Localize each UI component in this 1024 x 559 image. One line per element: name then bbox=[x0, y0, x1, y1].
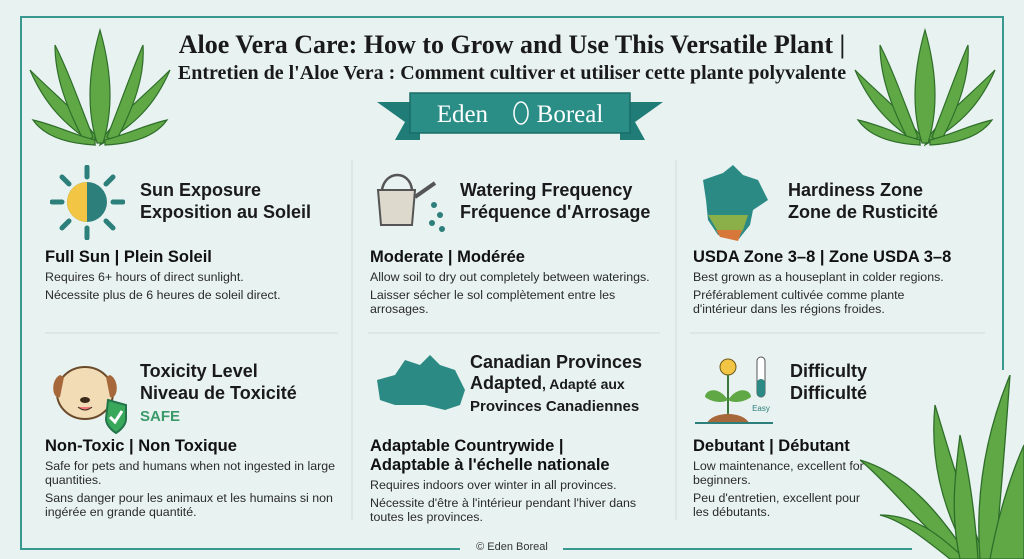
text block: Moderate | Modérée bbox=[370, 248, 525, 266]
heading: Difficulty bbox=[790, 361, 867, 381]
text block: Laisser sécher le sol complètement entre les arrosages. bbox=[370, 288, 615, 316]
text block bbox=[370, 437, 636, 524]
panel: hardiness bbox=[693, 165, 951, 316]
heading: Exposition au Soleil bbox=[140, 202, 311, 222]
icon: sprout with gauge bbox=[695, 356, 773, 424]
panel: provinces bbox=[370, 352, 642, 524]
text block: USDA Zone 3–8 | Zone USDA 3–8 bbox=[693, 248, 951, 266]
text block: Adaptable Countrywide | bbox=[370, 437, 563, 455]
title: Aloe Vera Care: How to Grow and Use This Versatile Plant | bbox=[179, 30, 845, 59]
heading bbox=[140, 180, 311, 222]
heading bbox=[470, 352, 642, 415]
banner: Eden Boreal: Eden OO Boreal bbox=[437, 101, 603, 128]
heading: Hardiness Zone bbox=[788, 180, 923, 200]
text block: Safe for pets and humans when not ingested in large quantities. bbox=[45, 459, 335, 487]
text block: Nécessite d'être à l'intérieur pendant l'hiver dans toutes les provinces. bbox=[370, 496, 636, 524]
text block: Adaptable à l'échelle nationale bbox=[370, 456, 610, 474]
heading: Canadian Provinces bbox=[470, 352, 642, 372]
banner: Eden Boreal bbox=[377, 92, 663, 140]
heading: Adapted, Adapté aux bbox=[470, 373, 625, 393]
text block: Peu d'entretien, excellent pour les débutants. bbox=[693, 491, 860, 519]
text block: Nécessite plus de 6 heures de soleil direct. bbox=[45, 288, 281, 302]
heading bbox=[790, 361, 867, 403]
text block: Best grown as a houseplant in colder regions. bbox=[693, 270, 944, 284]
icon: north america map bbox=[703, 165, 768, 241]
text block bbox=[45, 437, 335, 519]
footer: © Eden Boreal bbox=[476, 541, 548, 553]
heading: Difficulté bbox=[790, 383, 867, 403]
heading: Zone de Rusticité bbox=[788, 202, 938, 222]
heading: Toxicity Level bbox=[140, 361, 258, 381]
icon: dog with shield bbox=[53, 366, 127, 434]
text block: Debutant | Débutant bbox=[693, 437, 850, 455]
icon: sun bbox=[50, 165, 125, 240]
text block: Requires 6+ hours of direct sunlight. bbox=[45, 270, 244, 284]
text block bbox=[370, 248, 650, 316]
text block: Full Sun | Plein Soleil bbox=[45, 248, 212, 266]
icon: aloe bottom right bbox=[860, 375, 1024, 559]
heading bbox=[788, 180, 938, 222]
panel: toxicity bbox=[45, 361, 335, 519]
heading: Fréquence d'Arrosage bbox=[460, 202, 650, 222]
text block: Sans danger pour les animaux et les humains si non ingérée en grande quantité. bbox=[45, 491, 333, 519]
heading bbox=[140, 361, 297, 425]
text block: Requires indoors over winter in all provinces. bbox=[370, 478, 617, 492]
heading: Watering Frequency bbox=[460, 180, 632, 200]
panel: sun exposure bbox=[45, 165, 311, 302]
panel: watering bbox=[370, 174, 650, 316]
text block: Low maintenance, excellent for beginners. bbox=[693, 459, 864, 487]
text block bbox=[693, 437, 864, 519]
text block: Non-Toxic | Non Toxique bbox=[45, 437, 237, 455]
text block bbox=[693, 248, 951, 316]
title: Entretien de l'Aloe Vera : Comment cultiver et utiliser cette plante polyvalente bbox=[178, 62, 846, 84]
title bbox=[178, 30, 846, 84]
heading bbox=[460, 180, 650, 222]
icon: aloe left bbox=[30, 28, 170, 146]
heading: Sun Exposure bbox=[140, 180, 261, 200]
icon: aloe right bbox=[854, 28, 996, 146]
text block: Préférablement cultivée comme plante d'intérieur dans les régions froides. bbox=[693, 288, 904, 316]
text block: Allow soil to dry out completely between waterings. bbox=[370, 270, 650, 284]
heading: Niveau de Toxicité bbox=[140, 383, 297, 403]
icon: canada map bbox=[377, 355, 465, 410]
text block bbox=[45, 248, 281, 302]
panel: difficulty bbox=[693, 356, 867, 519]
icon: watering can bbox=[376, 174, 445, 232]
heading: SAFE bbox=[140, 408, 180, 425]
heading: Provinces Canadiennes bbox=[470, 398, 639, 415]
icon: sprout with gauge: Easy bbox=[752, 404, 770, 413]
